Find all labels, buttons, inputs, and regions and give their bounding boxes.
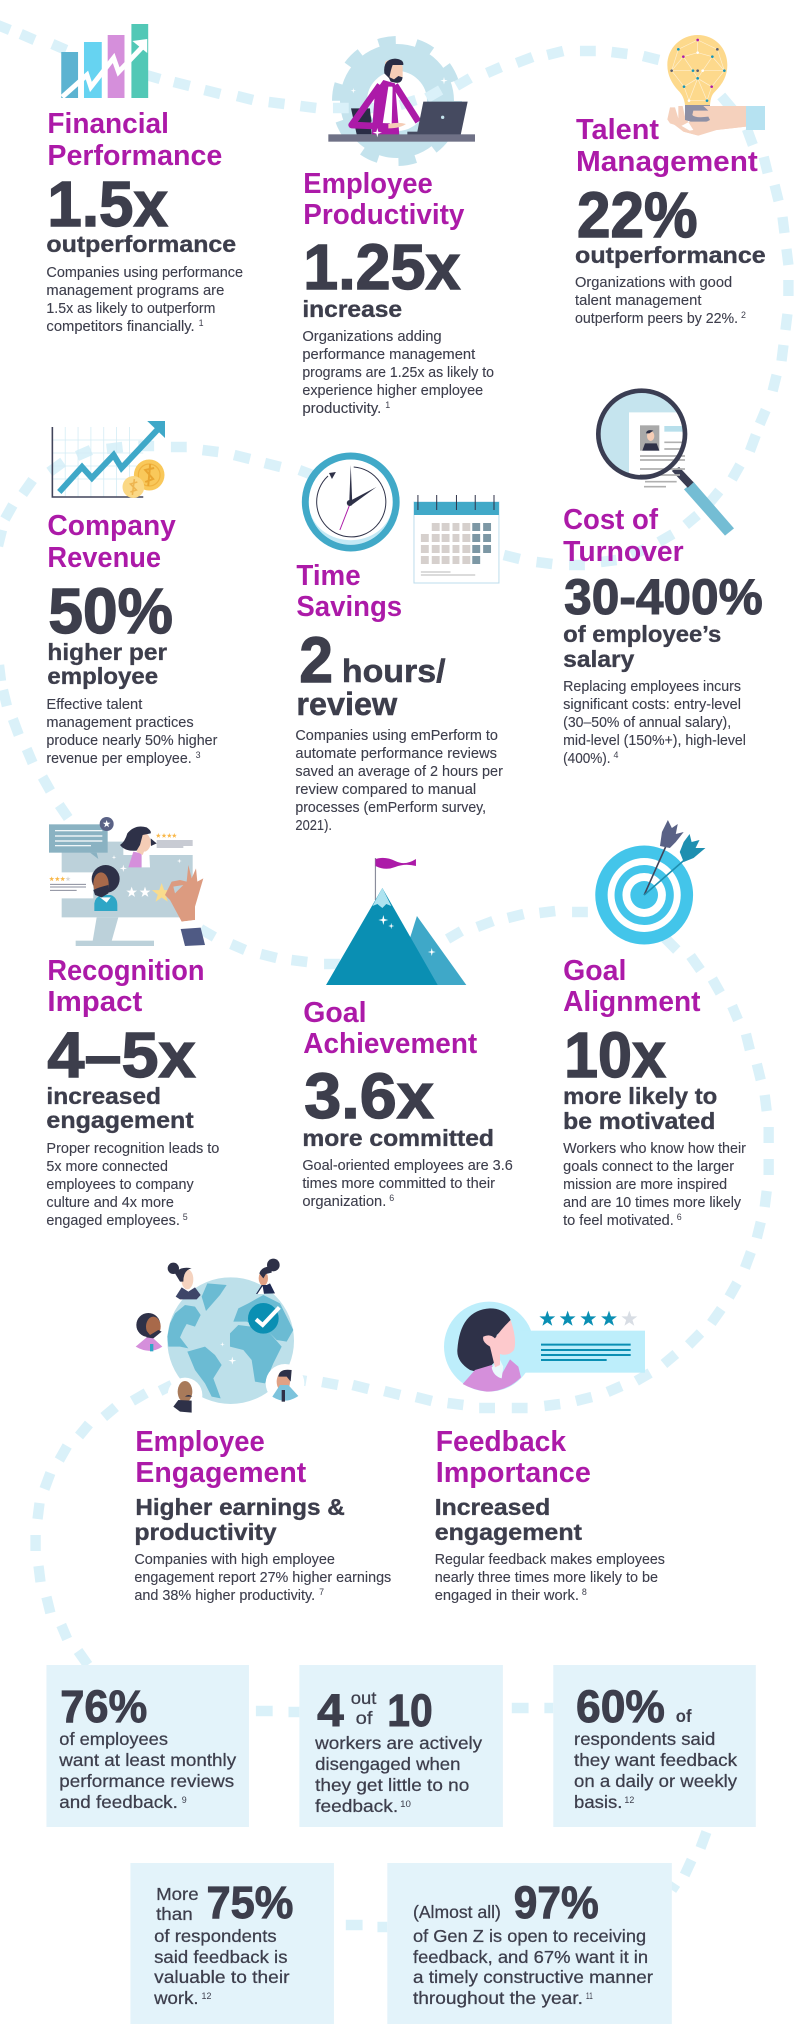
icon: magnifying glass over resume: [598, 391, 734, 536]
body text: [302, 1158, 513, 1210]
body text: 1.5x as likely to outperform: [46, 301, 215, 317]
icon: calendar: [414, 495, 499, 583]
heading: Turnover: [563, 536, 684, 568]
heading: Goal: [563, 955, 626, 987]
body text: [563, 1141, 746, 1229]
heading: Impact: [47, 986, 143, 1018]
icon: light bulb in hand: [667, 35, 765, 136]
body text: engagement report 27% higher earnings: [134, 1570, 391, 1586]
stat text: [314, 1733, 482, 1816]
stat text: performance reviews: [59, 1771, 234, 1791]
body text: Companies with high employee: [134, 1552, 335, 1568]
body text: [563, 679, 746, 767]
subheading: Increased: [435, 1494, 550, 1520]
subheading: Higher earnings &: [135, 1494, 345, 1520]
big number: 10x: [564, 1020, 666, 1091]
heading: Revenue: [47, 542, 161, 574]
subheading: productivity: [134, 1519, 277, 1545]
body text: 2: [741, 310, 746, 320]
body text: 1: [199, 318, 204, 328]
heading: Goal: [303, 997, 367, 1029]
body text: goals connect to the larger: [563, 1159, 734, 1175]
stat text: [413, 1926, 653, 2008]
body text: engaged in their work.: [435, 1588, 579, 1604]
stat number: More: [156, 1884, 199, 1904]
body text: Organizations adding: [302, 329, 442, 345]
body text: and are 10 times more likely: [563, 1195, 742, 1211]
body text: performance management: [302, 347, 475, 363]
body text: 5: [183, 1212, 188, 1222]
stat text: they want feedback: [574, 1750, 737, 1770]
heading: Financial: [47, 108, 169, 140]
body text: programs are 1.25x as likely to: [302, 365, 494, 381]
stat text: work.: [153, 1988, 199, 2008]
heading: Talent: [576, 114, 660, 146]
panel: employee engagement: [134, 1259, 391, 1604]
body text: Effective talent: [46, 697, 142, 713]
body text: revenue per employee.: [46, 751, 192, 767]
body text: [295, 728, 503, 834]
body text: (400%).: [563, 751, 611, 767]
icon: clock: [305, 456, 396, 548]
heading: [303, 168, 465, 231]
body text: [46, 1141, 219, 1229]
body text: 4: [614, 750, 619, 760]
panel: goal alignment: [563, 820, 746, 1229]
stat text: workers are actively: [314, 1733, 482, 1753]
body text: times more committed to their: [302, 1176, 495, 1192]
heading: Achievement: [303, 1028, 478, 1060]
panel: financial performance: [46, 24, 243, 335]
body text: processes (emPerform survey,: [295, 800, 486, 816]
heading: [47, 955, 205, 1018]
body text: Replacing employees incurs: [563, 679, 741, 695]
heading: [47, 108, 222, 172]
stat number: of: [676, 1706, 692, 1726]
stat text: said feedback is: [154, 1947, 288, 1967]
body text: 6: [677, 1212, 682, 1222]
subheading: [134, 1494, 345, 1545]
stat text: 11: [586, 1991, 593, 2001]
heading: Cost of: [563, 504, 659, 536]
stat number: of: [356, 1708, 373, 1728]
big number: review: [296, 686, 397, 722]
panel: talent management: [575, 35, 766, 327]
stat text: want at least monthly: [58, 1750, 236, 1770]
stat text: of Gen Z is open to receiving: [413, 1926, 646, 1946]
heading: Importance: [436, 1457, 591, 1489]
heading: Employee: [303, 168, 433, 200]
body text: outperform peers by 22%.: [575, 311, 738, 327]
body text: 8: [582, 1587, 587, 1597]
stat box: 60%: [553, 1665, 756, 1827]
subheading: [46, 1083, 194, 1133]
stat text: feedback, and 67% want it in: [413, 1947, 648, 1967]
stat box: 4 out of 10: [299, 1665, 503, 1827]
heading: Recognition: [47, 955, 205, 987]
body text: Workers who know how their: [563, 1141, 746, 1157]
body text: experience higher employee: [302, 383, 483, 399]
body text: automate performance reviews: [295, 746, 497, 762]
stat text: and feedback.: [59, 1792, 178, 1812]
body text: employees to company: [46, 1177, 194, 1193]
subheading: increase: [302, 296, 402, 322]
stat text: 12: [624, 1795, 634, 1805]
big number: [296, 625, 446, 722]
heading: [563, 955, 701, 1018]
icon: globe with people: [136, 1259, 304, 1413]
subheading: [563, 621, 721, 672]
body text: [46, 697, 218, 767]
stat number: [317, 1687, 433, 1736]
panel: time savings: [295, 456, 503, 834]
body text: 2021).: [295, 818, 332, 834]
heading: [135, 1426, 307, 1489]
stat text: [574, 1729, 737, 1812]
subheading: increased: [46, 1083, 161, 1109]
subheading: [47, 639, 167, 689]
panel: goal achievement: [302, 858, 513, 1210]
body text: to feel motivated.: [563, 1213, 674, 1229]
heading: [576, 114, 758, 178]
body text: 7: [319, 1587, 324, 1597]
heading: [296, 560, 402, 623]
stat number: 60%: [576, 1683, 665, 1732]
body text: saved an average of 2 hours per: [295, 764, 503, 780]
subheading: be motivated: [563, 1108, 715, 1134]
big number: 50%: [48, 576, 173, 647]
body text: organization.: [302, 1194, 386, 1210]
stat number: 10: [387, 1687, 433, 1736]
subheading: engagement: [435, 1519, 582, 1545]
stat text: basis.: [574, 1792, 622, 1812]
body text: talent management: [575, 293, 701, 309]
subheading: [435, 1494, 582, 1545]
body text: culture and 4x more: [46, 1195, 174, 1211]
heading: Productivity: [303, 199, 465, 231]
body text: 6: [389, 1193, 394, 1203]
body text: produce nearly 50% higher: [46, 733, 218, 749]
icon: revenue line chart with coins: [52, 421, 165, 498]
heading: Management: [576, 146, 758, 178]
icon: review card with woman and stars: [444, 1302, 645, 1392]
stat text: throughout the year.: [413, 1988, 583, 2008]
heading: [436, 1426, 591, 1489]
body text: [302, 329, 494, 417]
heading: [303, 997, 478, 1060]
icon: mountain with flag: [326, 858, 466, 985]
body text: Goal-oriented employees are 3.6: [302, 1158, 513, 1174]
subheading: of employee’s: [563, 621, 721, 647]
body text: 1: [385, 400, 390, 410]
stat number: 97%: [514, 1879, 599, 1928]
body text: [134, 1552, 391, 1604]
body text: competitors financially.: [46, 319, 195, 335]
panel: employee productivity: [302, 39, 494, 417]
body text: mid-level (150%+), high-level: [563, 733, 746, 749]
body text: (30–50% of annual salary),: [563, 715, 731, 731]
subheading: salary: [563, 646, 635, 672]
body text: [435, 1552, 665, 1604]
icon: rising bar chart: [61, 24, 148, 98]
heading: Savings: [296, 591, 402, 623]
panel: recognition impact: [46, 817, 219, 1229]
stat text: 10: [400, 1799, 411, 1809]
heading: Company: [47, 510, 176, 542]
icon: target with arrows: [595, 820, 705, 944]
stat text: 12: [202, 1991, 211, 2001]
big number: 1.25x: [303, 232, 460, 303]
body text: management programs are: [46, 283, 224, 299]
body text: management practices: [46, 715, 194, 731]
heading: Employee: [135, 1426, 265, 1458]
stat number: out: [351, 1688, 377, 1708]
big number: 30-400%: [564, 569, 763, 625]
stat box: 76%: [46, 1665, 249, 1827]
panel: cost of turnover: [563, 391, 763, 767]
icon: recognition monitor with people and stars: [49, 817, 205, 946]
body text: [46, 265, 243, 335]
stat box: more than 75%: [130, 1863, 334, 2024]
stat number: (Almost all): [413, 1902, 501, 1922]
stat text: disengaged when: [315, 1754, 460, 1774]
subheading: outperformance: [46, 231, 236, 257]
icon: gear behind person: [338, 42, 456, 160]
subheading: higher per: [47, 639, 167, 665]
big number: 3.6x: [304, 1061, 434, 1132]
body text: mission are more inspired: [563, 1177, 727, 1193]
big number: hours/: [342, 653, 446, 689]
subheading: more likely to: [563, 1083, 717, 1109]
heading: Performance: [47, 140, 222, 172]
stat box: almost all 97%: [387, 1863, 672, 2024]
stat text: [58, 1729, 236, 1812]
stat number: 75%: [206, 1879, 293, 1928]
subheading: [563, 1083, 717, 1134]
body text: nearly three times more likely to be: [435, 1570, 658, 1586]
body text: 5x more connected: [46, 1159, 168, 1175]
subheading: engagement: [46, 1107, 194, 1133]
stat text: they get little to no: [315, 1775, 469, 1795]
heading: Alignment: [563, 986, 701, 1018]
body text: engaged employees.: [46, 1213, 180, 1229]
stat text: [153, 1926, 290, 2008]
icon: person at laptop: [328, 39, 475, 142]
body text: productivity.: [302, 401, 381, 417]
stat text: valuable to their: [154, 1967, 290, 1987]
stat number: than: [156, 1904, 193, 1924]
big number: 22%: [577, 180, 698, 251]
stat text: respondents said: [574, 1729, 715, 1749]
stat number: [413, 1879, 599, 1928]
heading: [563, 504, 684, 568]
body text: and 38% higher productivity.: [134, 1588, 315, 1604]
body text: Proper recognition leads to: [46, 1141, 219, 1157]
stat text: feedback.: [315, 1796, 398, 1816]
big number: 4–5x: [47, 1020, 196, 1091]
body text: [575, 275, 746, 327]
panel: feedback importance: [435, 1302, 665, 1604]
body text: Regular feedback makes employees: [435, 1552, 665, 1568]
body text: significant costs: entry-level: [563, 697, 741, 713]
body text: Companies using performance: [46, 265, 243, 281]
stat number: [156, 1879, 293, 1928]
subheading: outperformance: [575, 242, 766, 268]
body text: Companies using emPerform to: [295, 728, 498, 744]
heading: Feedback: [436, 1426, 566, 1458]
stat text: on a daily or weekly: [574, 1771, 737, 1791]
subheading: employee: [47, 663, 158, 689]
stat text: 9: [182, 1795, 187, 1805]
stat number: 4: [317, 1687, 344, 1736]
heading: Engagement: [135, 1457, 307, 1489]
big number: 2: [299, 625, 333, 696]
heading: Time: [296, 560, 361, 592]
big number: 1.5x: [47, 169, 168, 240]
panel: company revenue: [46, 421, 218, 767]
stat text: of respondents: [154, 1926, 277, 1946]
stat text: of employees: [59, 1729, 168, 1749]
stat number: 76%: [60, 1683, 147, 1732]
stat text: a timely constructive manner: [413, 1967, 653, 1987]
body text: Organizations with good: [575, 275, 732, 291]
body text: review compared to manual: [295, 782, 476, 798]
heading: [47, 510, 176, 574]
body text: 3: [196, 750, 201, 760]
subheading: more committed: [302, 1125, 494, 1151]
